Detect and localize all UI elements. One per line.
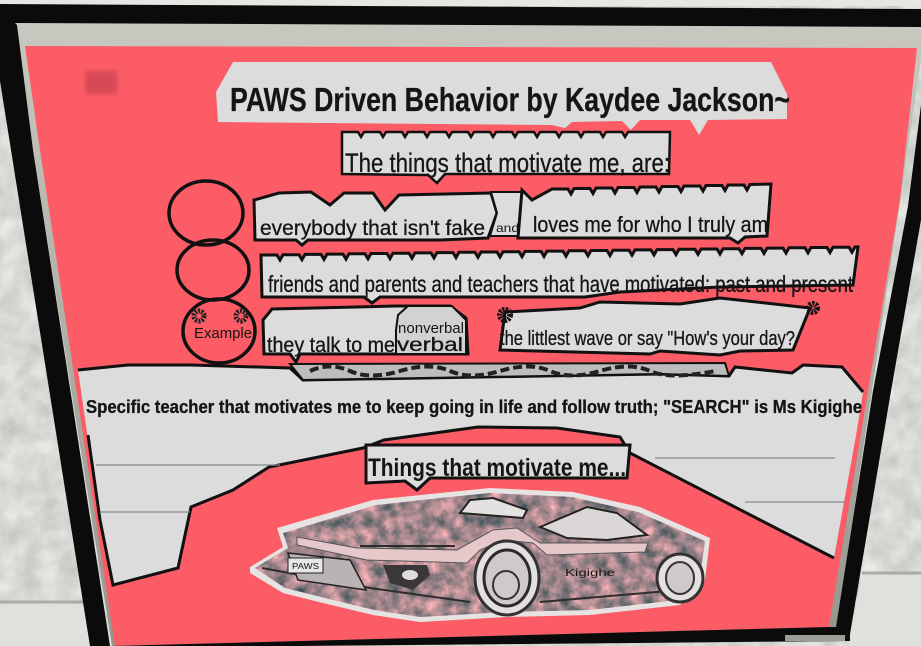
- subheading: things that motivate me: [366, 445, 630, 490]
- heading: the things that motivate me: [342, 132, 670, 183]
- large paper sheet with teacher sentence: [78, 365, 863, 585]
- rear badge: [383, 565, 430, 590]
- car body: [255, 493, 705, 617]
- nonverbal and verbal speech box: verbal: [397, 335, 463, 356]
- binder zipper pull: [785, 635, 845, 641]
- motivator box: friends: [261, 247, 858, 303]
- motivator box: loves me: loves me for who I truly am: [533, 212, 768, 237]
- rear panel: [288, 553, 366, 590]
- ornamental strip: [290, 363, 729, 380]
- example circle: [183, 299, 255, 363]
- connector: and: [490, 192, 524, 236]
- title text: PAWS Driven Behavior by Kaydee Jackson~: [230, 81, 790, 118]
- licence plate: PAWS: [292, 562, 319, 571]
- binder frame left edge: [0, 8, 110, 646]
- large paper sheet with teacher sentence: Specific teacher that motivates me to keep going in life and follow truth; "SEARCH" is Ms Kigighe: [86, 397, 862, 417]
- nonverbal and verbal speech box: [396, 306, 466, 356]
- example circle: Example: [194, 325, 252, 342]
- binder frame right edge: [834, 105, 921, 640]
- heading: the things that motivate me: The things that motivate me, are:: [345, 148, 670, 178]
- empty circle 1: [169, 181, 243, 245]
- motivator box: everybody: [254, 192, 497, 245]
- binder frame bottom edge: [112, 627, 850, 646]
- dark body lines: [262, 546, 680, 602]
- small wheel: [657, 554, 703, 602]
- car drawing cutout: [250, 488, 710, 622]
- large wheel: [475, 541, 539, 615]
- example box: littlest wave: the littlest wave or say "How's your day?: [500, 328, 795, 350]
- title strip: [216, 62, 790, 135]
- example box: they talk: they talk to me: [267, 334, 395, 357]
- example box: they talk: [263, 306, 468, 362]
- nonverbal and verbal speech box: nonverbal: [398, 320, 464, 337]
- licence plate: [288, 558, 323, 573]
- connector: and: and: [496, 221, 519, 235]
- windows: [460, 498, 527, 518]
- motivator box: loves me: [518, 184, 771, 243]
- tape mark: [85, 71, 117, 94]
- binder frame top edge: [0, 4, 921, 30]
- empty circle 2: [177, 240, 249, 300]
- spoiler and side band: [297, 528, 648, 563]
- door lettering: Kigighe: [565, 568, 616, 579]
- motivator box: everybody: everybody that isn't fake: [260, 217, 485, 240]
- subheading: things that motivate me: Things that motivate me...: [368, 454, 626, 482]
- example box: littlest wave: [500, 298, 817, 355]
